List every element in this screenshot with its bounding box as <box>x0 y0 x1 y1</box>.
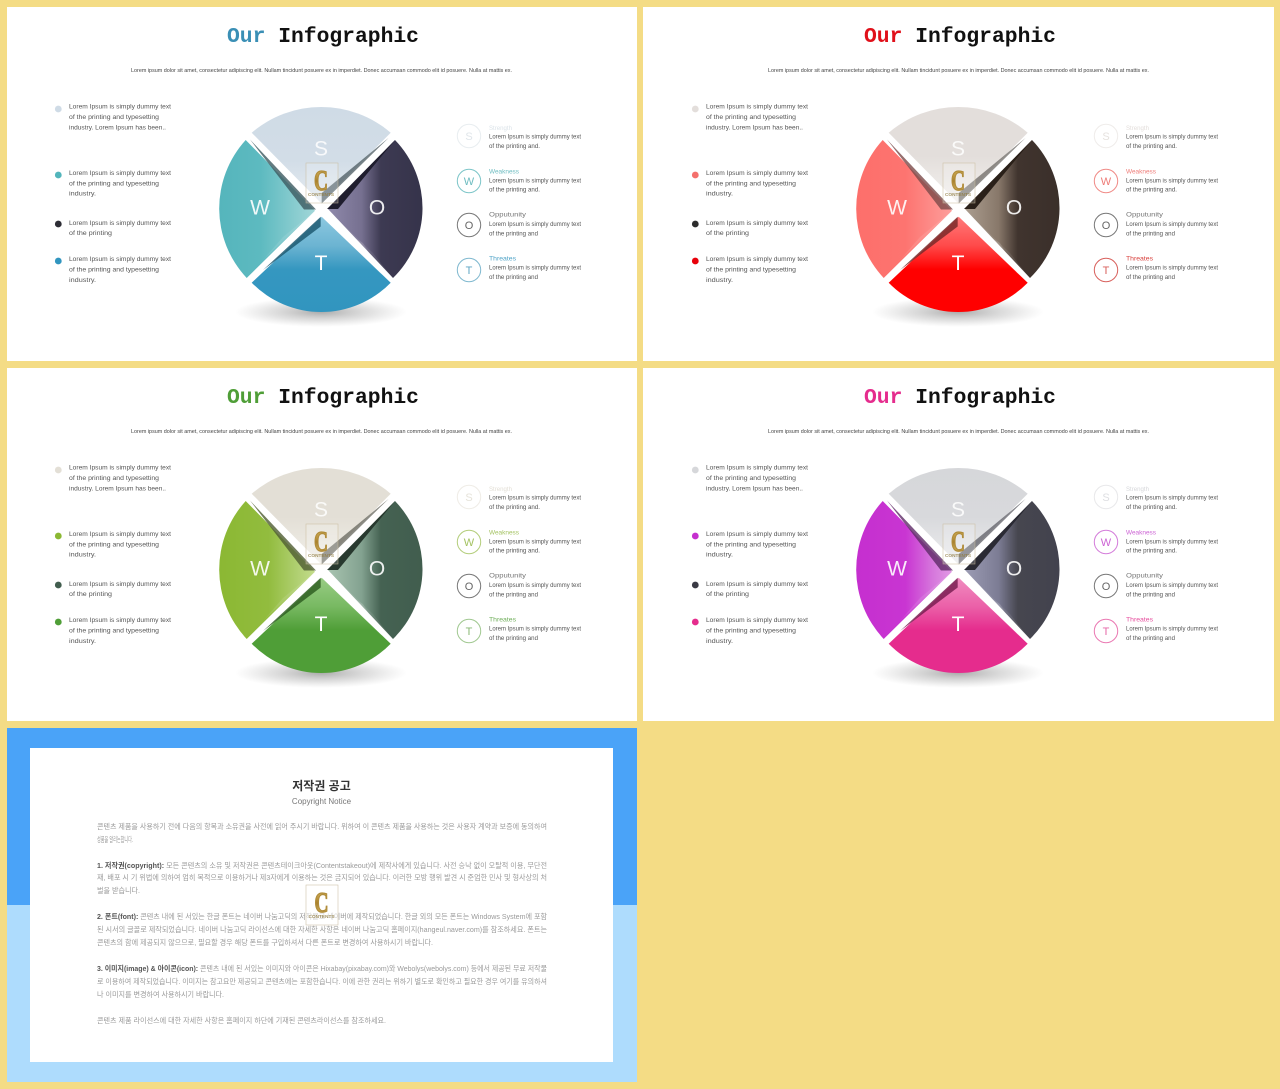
right legend: O <box>1102 220 1111 232</box>
SWOT pie chart: S <box>951 498 965 522</box>
left bullet list <box>55 464 171 645</box>
right legend: Lorem Ipsum is simply dummy text <box>1126 626 1218 632</box>
right legend: of the printing and <box>1126 635 1175 642</box>
right legend: Weakness <box>489 530 519 536</box>
left bullet list: industry. Lorem Ipsum has been.. <box>69 486 166 492</box>
logo watermark: C <box>951 165 965 197</box>
right legend: of the printing and. <box>1126 143 1177 150</box>
right legend: of the printing and. <box>489 504 540 511</box>
logo watermark: CONTENTS <box>308 914 335 919</box>
left bullet list: Lorem Ipsum is simply dummy text <box>706 617 808 624</box>
right legend: Weakness <box>489 168 519 176</box>
right legend: W <box>1101 176 1112 188</box>
left bullet list: of the printing and typesetting <box>706 628 796 634</box>
left bullet list: of the printing and typesetting <box>706 266 796 274</box>
logo watermark <box>306 163 338 203</box>
right legend: Lorem Ipsum is simply dummy text <box>1126 134 1218 140</box>
right legend: Threates <box>1126 616 1153 624</box>
SWOT pie chart <box>856 107 1060 327</box>
left bullet list: Lorem Ipsum is simply dummy text <box>706 464 808 472</box>
right legend: O <box>465 220 474 232</box>
left bullet list: Lorem Ipsum is simply dummy text <box>706 220 808 227</box>
right legend: Lorem Ipsum is simply dummy text <box>1126 178 1218 184</box>
left bullet list: of the printing and typesetting <box>706 475 796 482</box>
left bullet list: of the printing and typesetting <box>69 542 159 548</box>
right legend: T <box>1103 626 1110 638</box>
right legend: Opputunity <box>1126 212 1164 218</box>
left bullet list <box>692 104 808 284</box>
left bullet list: industry. <box>706 190 733 198</box>
left bullet list: industry. <box>69 638 96 645</box>
right legend: O <box>1102 581 1111 593</box>
right legend: S <box>1102 131 1110 143</box>
right legend: of the printing and <box>1126 592 1175 598</box>
right legend <box>457 485 581 643</box>
paragraph 2: font: 2. 폰트(font): 콘텐츠 내에 된 서있는 한글 폰트는 네이버 나눔고딕의 저작물로 네이버에 제작되었습니다. 한글 외의 모든 폰트는 Windows System에 포함 <box>97 912 547 921</box>
SWOT pie chart <box>219 107 423 327</box>
logo watermark <box>943 524 975 564</box>
right legend: Lorem Ipsum is simply dummy text <box>1126 494 1218 502</box>
right legend: Lorem Ipsum is simply dummy text <box>489 221 581 228</box>
left bullet list: Lorem Ipsum is simply dummy text <box>69 256 171 263</box>
right legend: T <box>1103 265 1110 277</box>
left bullet list: industry. Lorem Ipsum has been.. <box>706 486 803 492</box>
left bullet list: industry. <box>706 552 733 558</box>
left bullet list: Lorem Ipsum is simply dummy text <box>69 464 171 472</box>
right legend: Lorem Ipsum is simply dummy text <box>1126 221 1218 228</box>
subtitle: Lorem ipsum dolor sit amet, consectetur adipiscing elit. Nullam tincidunt posuere ex in imperdiet. Donec accumsan commodo elit id posuere. Nulla at mattis ex. <box>768 429 1149 435</box>
right legend: S <box>465 131 473 143</box>
right legend: Opputunity <box>489 212 527 218</box>
SWOT pie chart: S <box>314 498 328 522</box>
SWOT pie chart: O <box>1006 558 1022 580</box>
right legend: of the printing and <box>489 592 538 598</box>
right legend: of the printing and. <box>1126 548 1177 554</box>
left bullet list: of the printing <box>706 591 749 598</box>
logo watermark: CONTENTS <box>945 553 971 558</box>
left bullet list: Lorem Ipsum is simply dummy text <box>706 581 808 588</box>
right legend: Lorem Ipsum is simply dummy text <box>489 134 581 140</box>
SWOT pie chart <box>219 468 423 688</box>
right legend: of the printing and. <box>1126 504 1177 511</box>
left bullet list: Lorem Ipsum is simply dummy text <box>69 581 171 588</box>
right legend: Lorem Ipsum is simply dummy text <box>489 494 581 502</box>
right legend: O <box>465 581 474 593</box>
title: Our Infographic <box>864 25 1056 49</box>
left bullet list: Lorem Ipsum is simply dummy text <box>69 220 171 227</box>
paragraph 2: font <box>97 912 547 947</box>
paragraph 3: image and icon: 로 이용하여 제작되었습니다. 이미지는 참고요만 제공되고 콘텐츠에는 포함한습니다. 이에 관한 권리는 위하기 별도로 확인하고 필요한 경우 여기를 유의하셔 <box>97 977 547 986</box>
subtitle: Lorem ipsum dolor sit amet, consectetur adipiscing elit. Nullam tincidunt posuere ex in imperdiet. Donec accumsan commodo elit id posuere. Nulla at mattis ex. <box>768 68 1149 74</box>
right legend: Lorem Ipsum is simply dummy text <box>489 264 581 272</box>
subtitle: Lorem ipsum dolor sit amet, consectetur adipiscing elit. Nullam tincidunt posuere ex in imperdiet. Donec accumsan commodo elit id posuere. Nulla at mattis ex. <box>131 68 512 74</box>
right legend <box>1094 124 1218 282</box>
left bullet list: of the printing and typesetting <box>69 114 159 121</box>
right legend: W <box>464 176 475 188</box>
SWOT pie chart: T <box>315 613 328 636</box>
right legend: of the printing and. <box>489 143 540 150</box>
paragraph 1: copyright: 1. 저작권(copyright): 모든 콘텐츠의 소유 및 저작권은 콘텐츠테이크아웃(Contentstakeout)에 제작사에게 있습니다. 사전 승낙 없이 오탈적 이용, 무단전 <box>97 861 547 870</box>
left bullet list: of the printing and typesetting <box>69 266 159 274</box>
title: Our Infographic <box>864 386 1056 410</box>
right legend: Lorem Ipsum is simply dummy text <box>489 582 581 589</box>
left bullet list <box>55 104 171 284</box>
right legend: Strength <box>1126 486 1149 493</box>
right legend: Opputunity <box>489 572 527 580</box>
left bullet list: industry. Lorem Ipsum has been.. <box>706 124 803 132</box>
logo watermark: CONTENTS <box>308 192 334 197</box>
left bullet list: of the printing <box>706 230 749 237</box>
right legend: of the printing and <box>489 274 538 281</box>
SWOT pie chart: W <box>250 558 270 580</box>
intro paragraph: 성품을 알리는합니다. <box>97 835 133 844</box>
copyright subheading: Copyright Notice <box>292 797 352 806</box>
left bullet list: of the printing and typesetting <box>69 180 159 188</box>
left bullet list: industry. <box>69 552 96 558</box>
intro paragraph: 콘텐츠 제품을 사용하기 전에 다음의 항목과 소유권을 사전에 읽어 주시기 바랍니다. 위하여 이 콘텐츠 제품을 사용하는 것은 사용자 계약과 보증에 동의하여 <box>97 822 547 831</box>
right legend: of the printing and <box>1126 274 1175 281</box>
left bullet list: Lorem Ipsum is simply dummy text <box>706 256 808 263</box>
right legend: Lorem Ipsum is simply dummy text <box>489 178 581 184</box>
left bullet list: of the printing and typesetting <box>69 475 159 482</box>
right legend: of the printing and. <box>489 548 540 554</box>
paragraph 3: image and icon: 나 이미지를 변경하여 사용하시기 바랍니다. <box>97 990 224 999</box>
panel: red SWOT slide <box>643 7 1274 361</box>
right legend: of the printing and. <box>1126 186 1177 194</box>
right legend: Lorem Ipsum is simply dummy text <box>1126 582 1218 589</box>
panel: blue SWOT slide <box>7 7 637 361</box>
left bullet list: of the printing and typesetting <box>69 628 159 634</box>
right legend: Weakness <box>1126 530 1156 536</box>
SWOT pie chart: W <box>887 558 907 580</box>
SWOT pie chart: W <box>887 196 907 220</box>
closing line: 콘텐츠 제품 라이선스에 대한 자세한 사항은 홈페이지 하단에 기재된 콘텐츠라이선스를 참조하세요. <box>97 1016 386 1025</box>
right legend: of the printing and <box>489 635 538 642</box>
SWOT pie chart: W <box>250 196 270 220</box>
right legend: Threates <box>1126 256 1153 262</box>
left bullet list: Lorem Ipsum is simply dummy text <box>706 170 808 177</box>
right legend: T <box>466 626 473 638</box>
paragraph 1: copyright <box>97 861 547 895</box>
paragraph 3: image and icon <box>97 964 547 999</box>
logo watermark: CONTENTS <box>945 192 971 197</box>
subtitle: Lorem ipsum dolor sit amet, consectetur adipiscing elit. Nullam tincidunt posuere ex in imperdiet. Donec accumsan commodo elit id posuere. Nulla at mattis ex. <box>131 429 512 435</box>
left bullet list: of the printing and typesetting <box>706 180 796 188</box>
title: Our Infographic <box>227 386 419 410</box>
SWOT pie chart: S <box>314 138 328 160</box>
right legend: Opputunity <box>1126 572 1164 580</box>
right legend <box>1094 485 1218 643</box>
left bullet list: Lorem Ipsum is simply dummy text <box>69 170 171 177</box>
panel: copyright notice <box>7 728 637 1082</box>
left bullet list: industry. Lorem Ipsum has been.. <box>69 124 166 132</box>
left bullet list: industry. <box>69 277 96 284</box>
left bullet list: of the printing and typesetting <box>706 114 796 121</box>
logo watermark <box>306 524 338 564</box>
logo watermark: C <box>314 887 328 919</box>
right legend: of the printing and <box>1126 230 1175 238</box>
right legend: of the printing and. <box>489 186 540 194</box>
right legend <box>457 124 581 282</box>
paragraph 1: copyright: 벌을 받습니다. <box>97 886 140 895</box>
SWOT pie chart: T <box>315 252 328 275</box>
right legend: Lorem Ipsum is simply dummy text <box>489 538 581 546</box>
panel: green SWOT slide <box>7 368 637 721</box>
right legend: of the printing and <box>489 230 538 238</box>
SWOT pie chart: S <box>951 138 965 160</box>
right legend: Threates <box>489 256 516 262</box>
right legend: Lorem Ipsum is simply dummy text <box>489 626 581 632</box>
right legend: Threates <box>489 616 516 624</box>
SWOT pie chart <box>856 468 1060 688</box>
logo watermark: C <box>314 165 328 197</box>
paragraph 2: font: 콘텐츠의 함에 제공되지 않으므로, 필요할 경우 해당 폰트를 구입하셔서 다른 폰트로 변경하여 사용하시기 바랍니다. <box>97 938 433 947</box>
SWOT pie chart: O <box>1006 196 1022 220</box>
logo watermark: C <box>314 526 328 558</box>
paragraph 1: copyright: 재, 배포 시 기 위법에 의하여 엄히 목적으로 이용하거나 제3자에게 이용하는 것은 금지되어 있습니다. 이러한 모방 행위 발견 시 준엄한 민사 및 형사상의 처 <box>97 873 547 882</box>
left bullet list: of the printing <box>69 591 112 598</box>
right legend: Strength <box>489 486 512 493</box>
right legend: S <box>465 492 473 504</box>
right legend: Weakness <box>1126 168 1156 176</box>
left bullet list: Lorem Ipsum is simply dummy text <box>706 531 808 538</box>
right legend: W <box>464 537 475 549</box>
paragraph 3: image and icon: 3. 이미지(image) & 아이콘(icon): 콘텐츠 내에 된 서있는 이미지와 아이콘은 Hixabay(pixabay.com)와 Webolys(webolys.com) 등에서 제공된 무료 저작물 <box>97 964 547 973</box>
panel: magenta SWOT slide <box>643 368 1274 721</box>
left bullet list: Lorem Ipsum is simply dummy text <box>706 104 808 110</box>
left bullet list: Lorem Ipsum is simply dummy text <box>69 531 171 538</box>
logo watermark: CONTENTS <box>308 553 334 558</box>
copyright heading: 저작권 공고 <box>292 778 351 793</box>
right legend: Strength <box>489 125 512 132</box>
title: Our Infographic <box>227 25 419 49</box>
left bullet list: industry. <box>69 190 96 198</box>
left bullet list: Lorem Ipsum is simply dummy text <box>69 104 171 110</box>
SWOT pie chart: T <box>952 252 965 275</box>
left bullet list <box>692 464 808 645</box>
left bullet list: industry. <box>706 638 733 645</box>
intro paragraph <box>97 822 547 844</box>
left bullet list: of the printing <box>69 230 112 237</box>
left bullet list: industry. <box>706 277 733 284</box>
logo watermark <box>943 163 975 203</box>
left bullet list: Lorem Ipsum is simply dummy text <box>69 617 171 624</box>
right legend: Lorem Ipsum is simply dummy text <box>1126 538 1218 546</box>
left bullet list: of the printing and typesetting <box>706 542 796 548</box>
SWOT pie chart: O <box>369 196 385 220</box>
logo watermark <box>306 885 338 925</box>
SWOT pie chart: O <box>369 558 385 580</box>
logo watermark: C <box>951 526 965 558</box>
right legend: S <box>1102 492 1110 504</box>
paragraph 2: font: 된 시서의 글꼴로 제작되었습니다. 네이버 나눔고딕 라이선스에 대한 자세한 사항은 네이버 나눔고딕 홈페이지(hangeul.naver.com)를 참조하세요. 폰트는 <box>97 925 547 934</box>
SWOT pie chart: T <box>952 613 965 636</box>
right legend: W <box>1101 537 1112 549</box>
right legend: Strength <box>1126 125 1149 132</box>
right legend: T <box>466 265 473 277</box>
right legend: Lorem Ipsum is simply dummy text <box>1126 264 1218 272</box>
